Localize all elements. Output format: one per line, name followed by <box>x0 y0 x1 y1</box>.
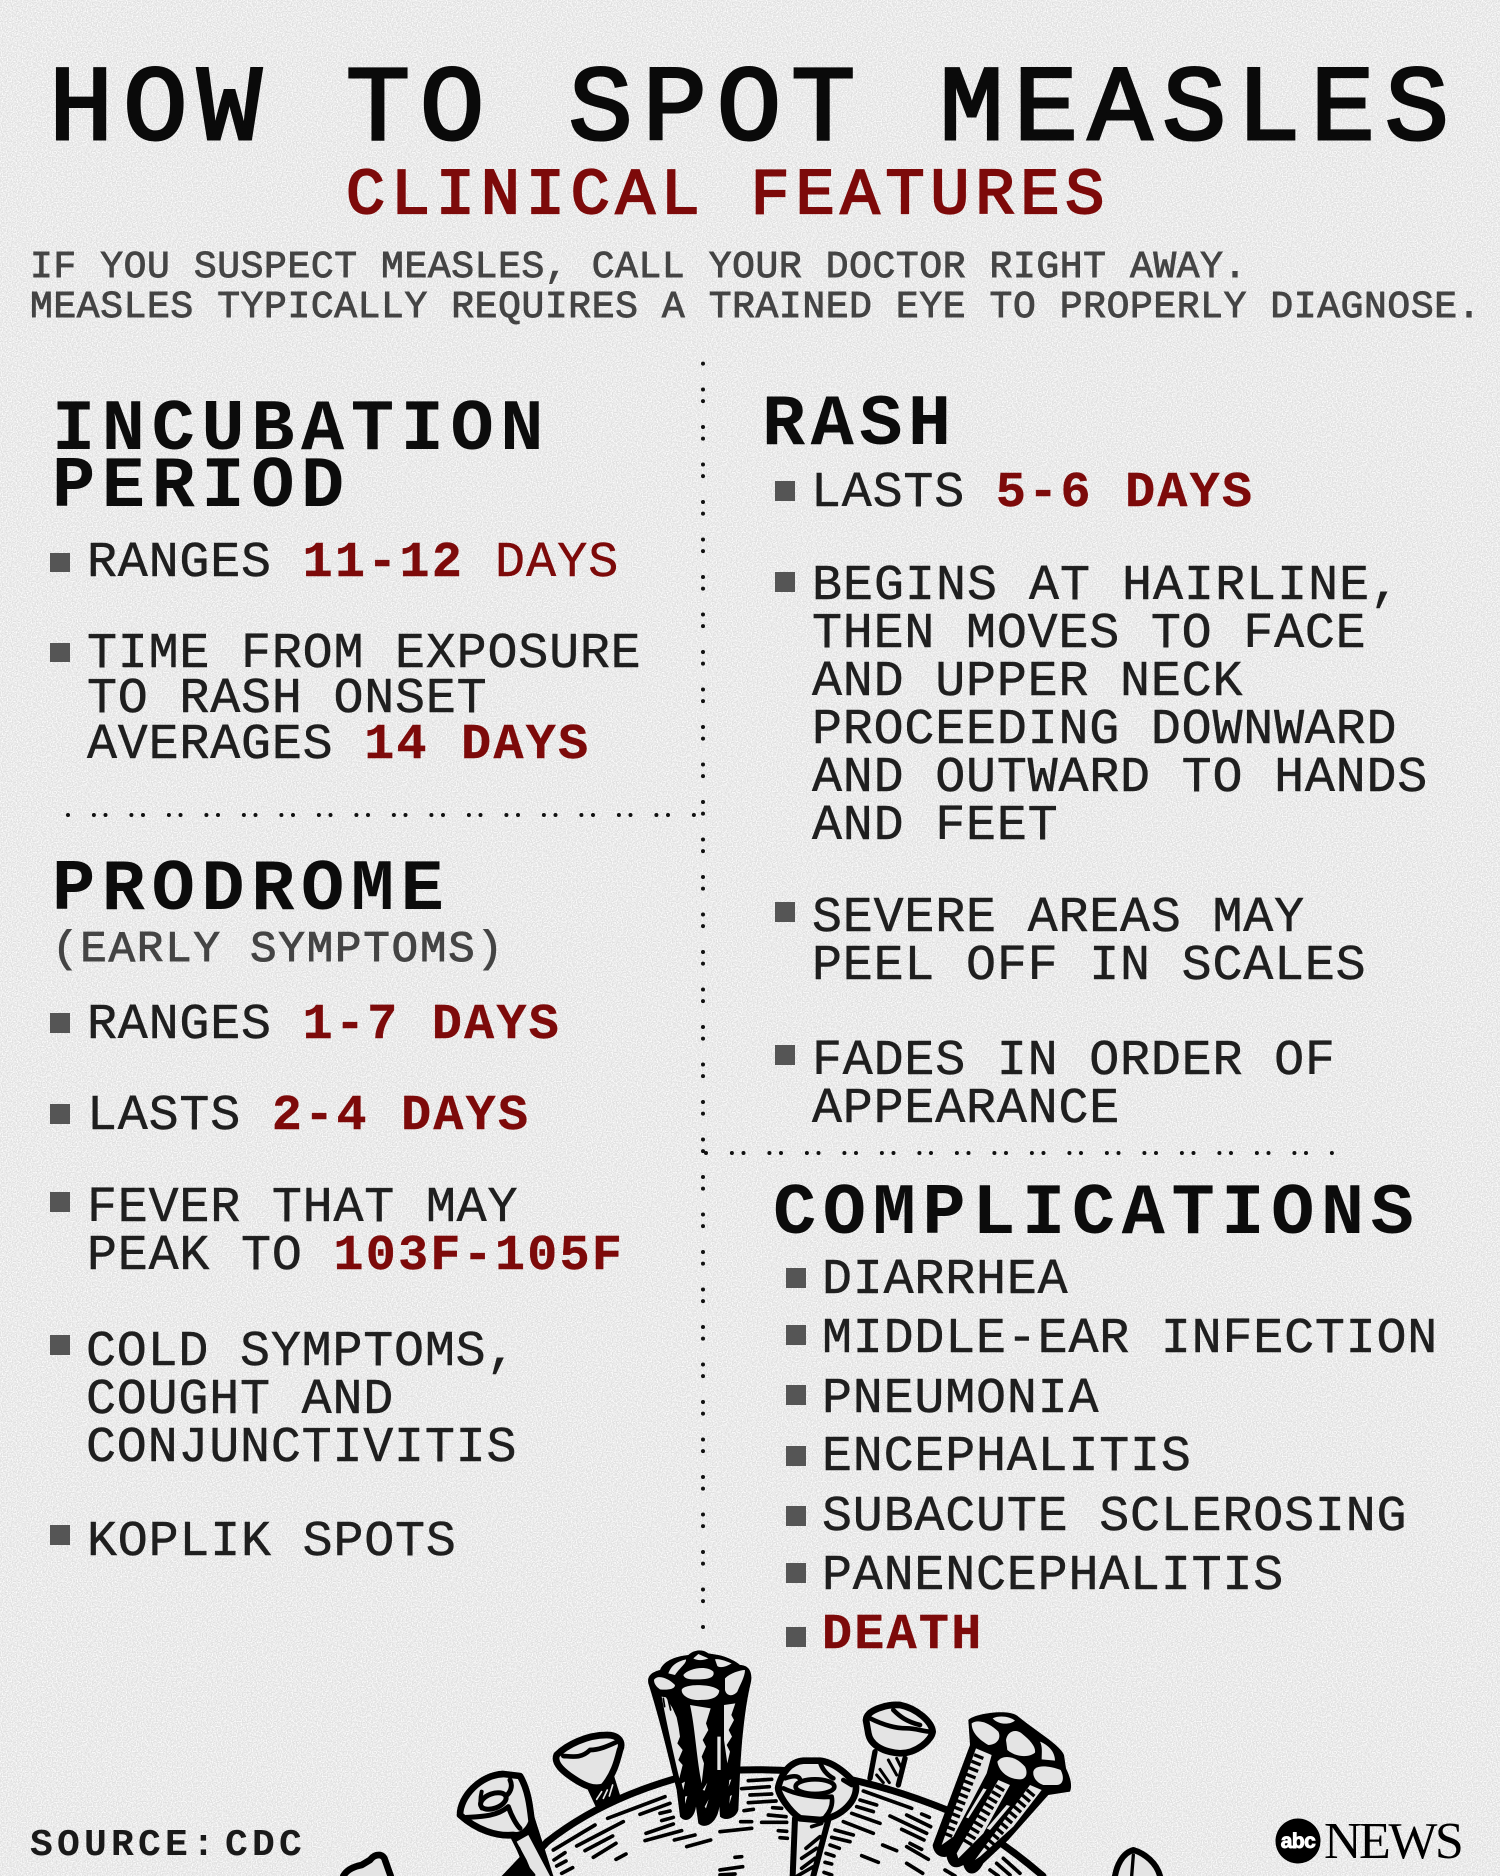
source: CDC <box>225 1824 306 1867</box>
intro text: IF YOU SUSPECT MEASLES, CALL YOUR DOCTOR RIGHT AWAY. <box>30 246 1247 289</box>
front centre spike <box>778 1761 856 1876</box>
left large spike <box>460 1774 553 1876</box>
item: cold symptoms: COUGHT AND <box>86 1372 394 1429</box>
intro text: MEASLES TYPICALLY REQUIRES A TRAINED EYE TO PROPERLY DIAGNOSE. <box>30 286 1481 329</box>
tall central spike <box>648 1650 751 1826</box>
item: pneumonia: PNEUMONIA <box>822 1371 1099 1428</box>
panel: incubation period <box>50 389 642 774</box>
panel: complications <box>773 1173 1438 1664</box>
item: fades <box>775 1033 1336 1138</box>
item: panencephalitis: PANENCEPHALITIS <box>822 1548 1284 1605</box>
item: lasts 5-6 days: LASTS 5-6 DAYS <box>811 465 1254 522</box>
item: diarrhea: DIARRHEA <box>822 1252 1068 1309</box>
heading: rash: RASH <box>762 384 956 466</box>
item: ranges 1-7 days: RANGES 1-7 DAYS <box>87 997 561 1054</box>
panel: prodrome <box>50 849 624 1571</box>
item: time from exposure: TO RASH ONSET <box>87 671 487 728</box>
item: fever: FEVER THAT MAY <box>87 1180 518 1237</box>
title: HOW TO SPOT MEASLES <box>49 51 1459 172</box>
subtitle: CLINICAL FEATURES <box>346 159 1110 233</box>
item: begins at hairline: AND UPPER NECK <box>812 654 1243 711</box>
left hatching <box>553 1797 711 1873</box>
item: severe areas <box>775 890 1366 995</box>
left small spike <box>556 1735 621 1807</box>
source: SOURCE: <box>30 1824 219 1867</box>
right large spike <box>933 1712 1071 1874</box>
item: begins at hairline: PROCEEDING DOWNWARD <box>812 702 1397 759</box>
item: fades: FADES IN ORDER OF <box>812 1033 1336 1090</box>
item: cold symptoms: COLD SYMPTOMS, <box>86 1324 517 1381</box>
item: koplik spots: KOPLIK SPOTS <box>87 1514 457 1571</box>
logo: abc news: NEWS <box>1324 1813 1461 1870</box>
heading: incubation period <box>52 389 550 528</box>
item: time from exposure <box>50 626 642 774</box>
item: fever <box>50 1180 624 1285</box>
item: fever: PEAK TO 103F-105F <box>87 1228 624 1285</box>
item: fades: APPEARANCE <box>812 1081 1120 1138</box>
item: cold symptoms <box>50 1324 517 1477</box>
heading: incubation period: PERIOD <box>52 446 351 528</box>
right hatching <box>720 1779 1020 1876</box>
item: time from exposure: AVERAGES 14 DAYS <box>87 717 590 774</box>
item: severe areas: SEVERE AREAS MAY <box>812 890 1305 947</box>
item: cold symptoms: CONJUNCTIVITIS <box>86 1420 517 1477</box>
right horizontal dotted divider <box>706 1151 1336 1155</box>
item: begins at hairline: AND FEET <box>812 798 1058 855</box>
bottom-left small spike <box>343 1855 391 1876</box>
item: begins at hairline <box>775 558 1428 855</box>
left horizontal dotted divider <box>68 813 698 817</box>
heading: prodrome: PRODROME <box>52 849 450 931</box>
intro text <box>30 246 1481 329</box>
logo: abc news: abc <box>1281 1830 1316 1853</box>
heading: complications: COMPLICATIONS <box>773 1173 1420 1255</box>
vertical dotted divider <box>701 364 705 1628</box>
subheading: early symptoms: (EARLY SYMPTOMS) <box>52 925 505 975</box>
item: begins at hairline: BEGINS AT HAIRLINE, <box>812 558 1401 615</box>
item: begins at hairline: THEN MOVES TO FACE <box>812 606 1366 663</box>
item: severe areas: PEEL OFF IN SCALES <box>812 938 1366 995</box>
heading: incubation period: INCUBATION <box>52 389 550 471</box>
illustration: measles virus <box>343 1650 1160 1876</box>
item: middle-ear infection: MIDDLE-EAR INFECTION <box>822 1311 1438 1368</box>
item: begins at hairline: AND OUTWARD TO HANDS <box>812 750 1428 807</box>
panel: rash <box>762 384 1428 1138</box>
item: ranges 11-12 days: RANGES 11-12 DAYS <box>87 535 619 592</box>
bottom-right spike <box>1115 1850 1160 1876</box>
item: death: DEATH <box>822 1607 984 1664</box>
right small spike <box>866 1705 933 1787</box>
item: subacute sclerosing: SUBACUTE SCLEROSING <box>822 1489 1407 1546</box>
item: lasts 2-4 days: LASTS 2-4 DAYS <box>87 1088 530 1145</box>
item: time from exposure: TIME FROM EXPOSURE <box>87 626 642 683</box>
source <box>30 1824 306 1867</box>
item: encephalitis: ENCEPHALITIS <box>822 1429 1192 1486</box>
